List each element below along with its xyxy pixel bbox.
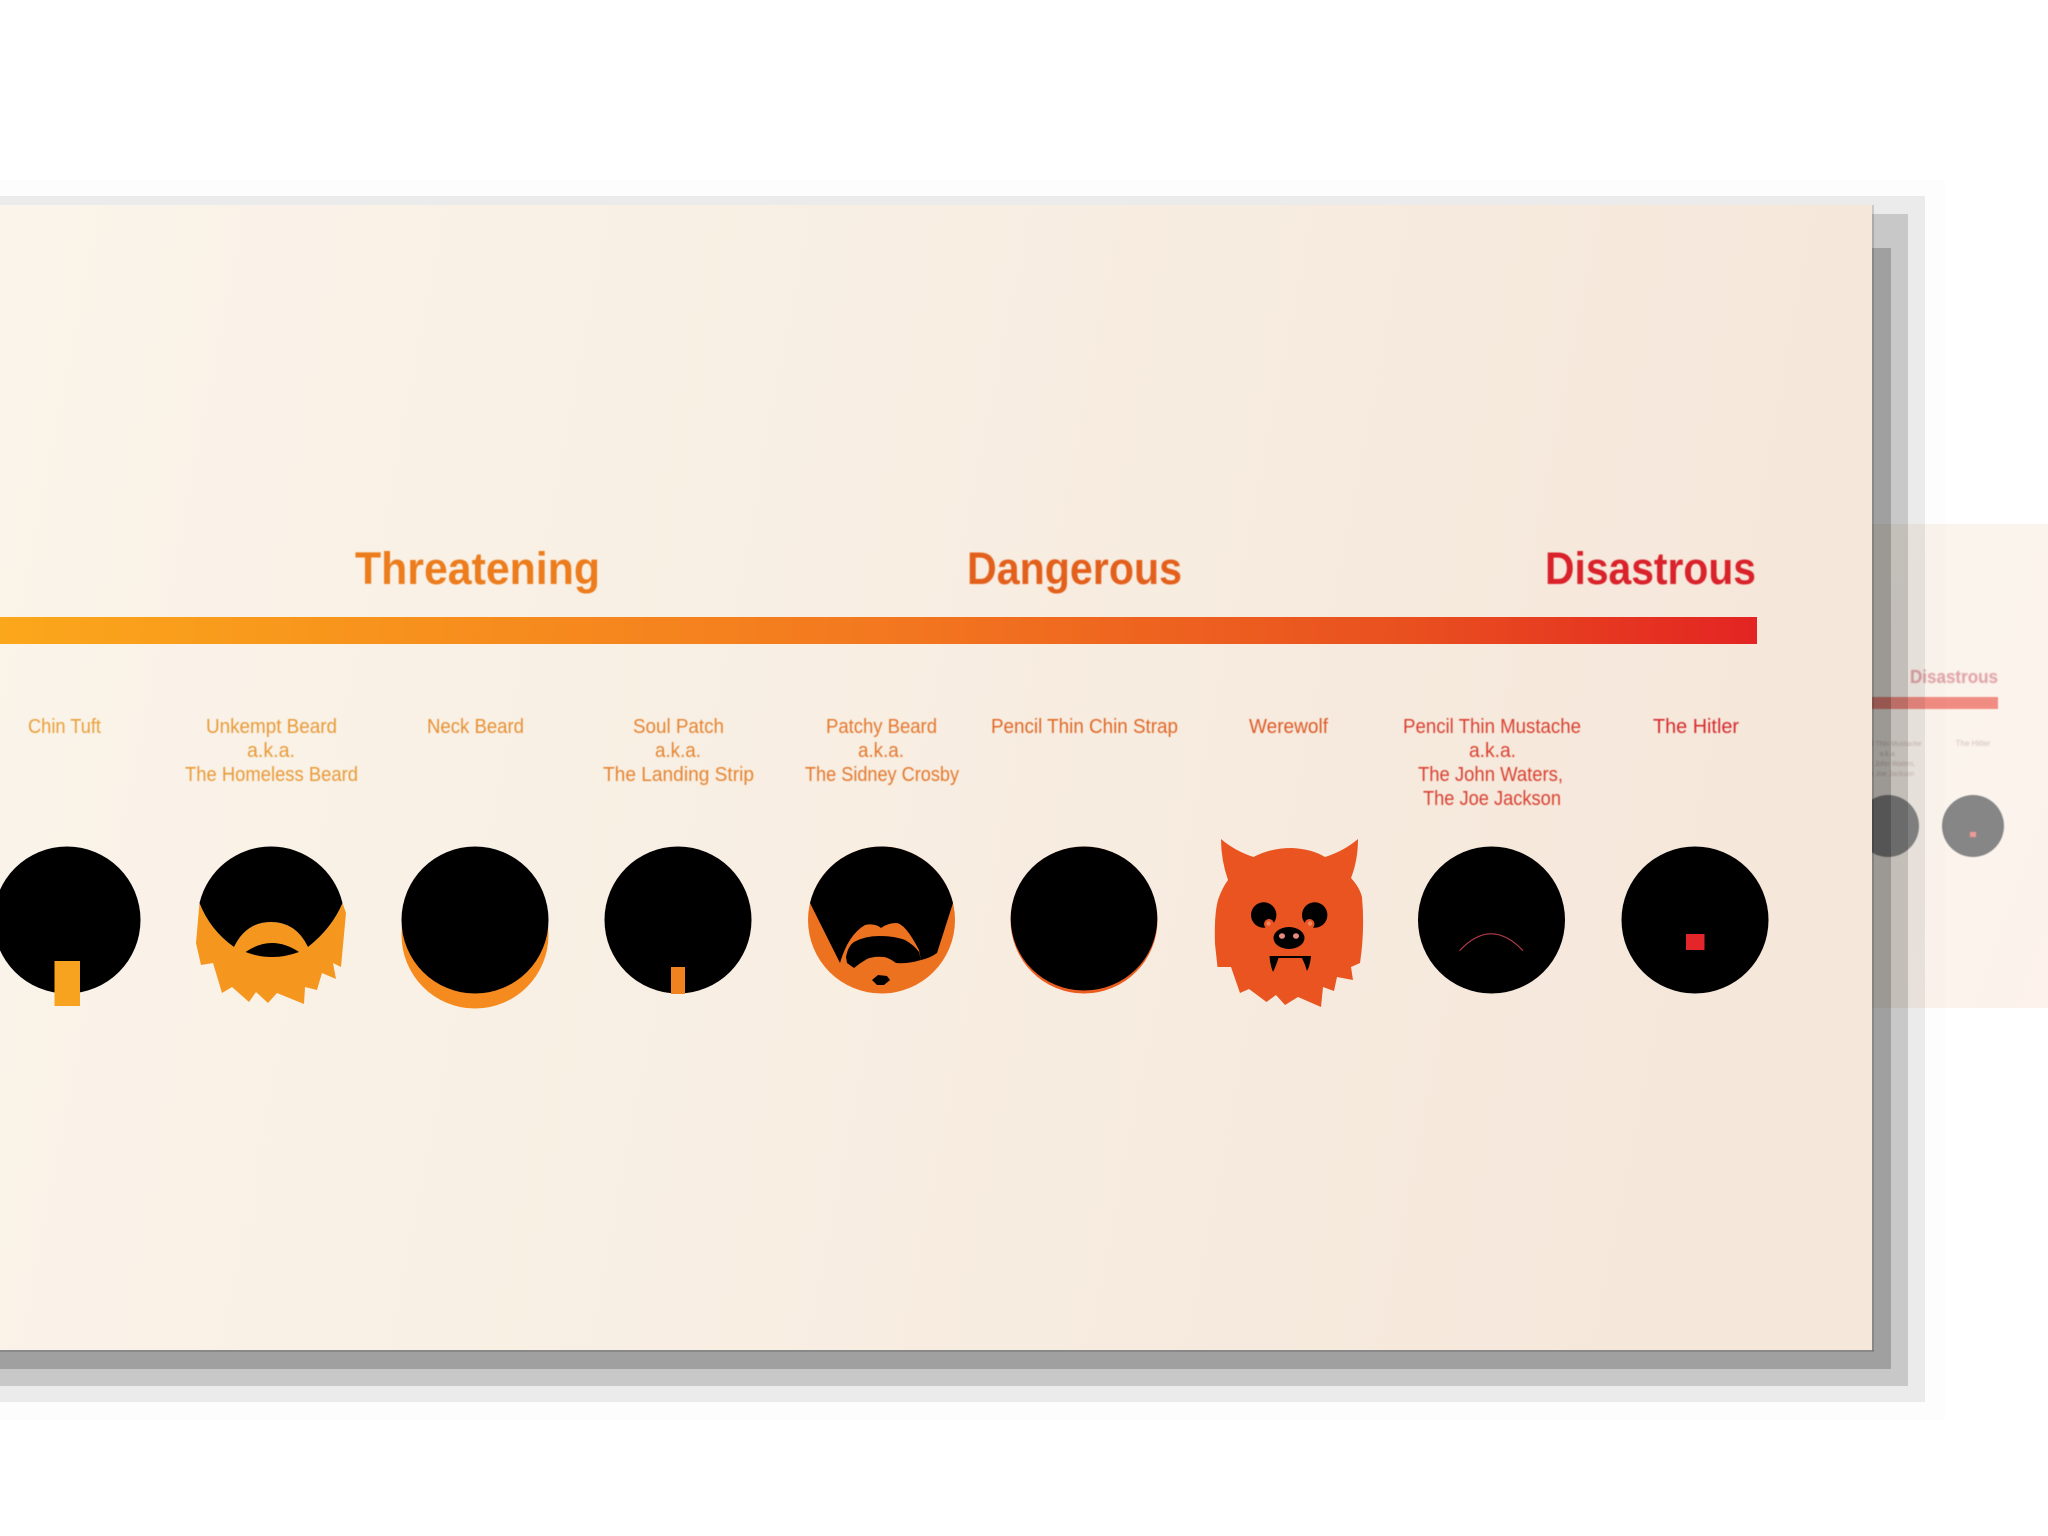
background panel: next slide peeking in at right xyxy=(1855,524,2048,1008)
label: The Hitler: The Hitler xyxy=(1653,716,1739,738)
label: Unkempt Beard: The Homeless Beard xyxy=(185,764,358,786)
severity headings xyxy=(355,543,1756,594)
faded circle: The Hitler xyxy=(1942,795,2004,857)
main panel xyxy=(0,205,1872,1350)
icon: Chin Tuft xyxy=(0,846,140,1006)
label: Pencil Thin Chin Strap: Pencil Thin Chin Strap xyxy=(991,716,1178,738)
faded label: The Hitler: The Hitler xyxy=(1956,739,1991,748)
label: Neck Beard: Neck Beard xyxy=(427,716,524,738)
faded label: Pencil Thin Mustache: Pencil Thin Mustache xyxy=(1855,741,1922,748)
drop shadow of main panel xyxy=(0,180,1945,1420)
beard labels xyxy=(28,716,1739,810)
heading: Disastrous: Disastrous xyxy=(1545,543,1756,594)
label: Pencil Thin Mustache: The John Waters, xyxy=(1418,764,1563,786)
label: Unkempt Beard xyxy=(185,716,358,786)
icon: Unkempt Beard xyxy=(196,847,346,1004)
faded label: Pencil Thin Mustache: The Joe Jackson xyxy=(1862,771,1915,778)
faded gradient bar xyxy=(1872,697,1998,709)
heading: Dangerous: Dangerous xyxy=(967,543,1182,594)
label: Pencil Thin Mustache xyxy=(1403,716,1581,810)
label: Soul Patch: The Landing Strip xyxy=(603,764,754,786)
label: Patchy Beard: The Sidney Crosby xyxy=(805,764,959,786)
label: Unkempt Beard: Unkempt Beard xyxy=(206,716,337,738)
label: Soul Patch: Soul Patch xyxy=(633,716,724,738)
label: Werewolf: Werewolf xyxy=(1249,716,1328,738)
label: Pencil Thin Mustache: The Joe Jackson xyxy=(1423,788,1561,810)
heading: faded Disastrous: Disastrous xyxy=(1910,667,1998,687)
faded label: Pencil Thin Mustache: The John Waters, xyxy=(1860,761,1916,768)
label: Patchy Beard xyxy=(805,716,959,786)
icon: Pencil Thin Chin Strap xyxy=(1010,846,1158,994)
icon: The Hitler xyxy=(1622,846,1768,994)
faded circle: Pencil Thin Mustache xyxy=(1857,795,1919,857)
label: Patchy Beard: Patchy Beard xyxy=(826,716,937,738)
label: Pencil Thin Mustache: a.k.a. xyxy=(1469,740,1516,762)
icon: Neck Beard xyxy=(402,846,548,1008)
label: Unkempt Beard: a.k.a. xyxy=(247,740,295,762)
label: Patchy Beard: a.k.a. xyxy=(858,740,904,762)
icon: Werewolf xyxy=(1215,839,1363,1007)
label: Soul Patch: a.k.a. xyxy=(655,740,701,762)
label: Chin Tuft: Chin Tuft xyxy=(28,716,101,738)
icon: Patchy Beard xyxy=(808,846,955,994)
label: Soul Patch xyxy=(603,716,754,786)
label: Pencil Thin Mustache: Pencil Thin Mustache xyxy=(1403,716,1581,738)
severity gradient bar xyxy=(0,617,1757,644)
icon: Soul Patch xyxy=(604,846,752,994)
heading: Threatening: Threatening xyxy=(355,543,600,594)
faded label: Pencil Thin Mustache: a.k.a. xyxy=(1879,751,1897,758)
faded label: Pencil Thin Mustache xyxy=(1855,741,1922,778)
icon: Pencil Thin Mustache xyxy=(1418,846,1565,994)
